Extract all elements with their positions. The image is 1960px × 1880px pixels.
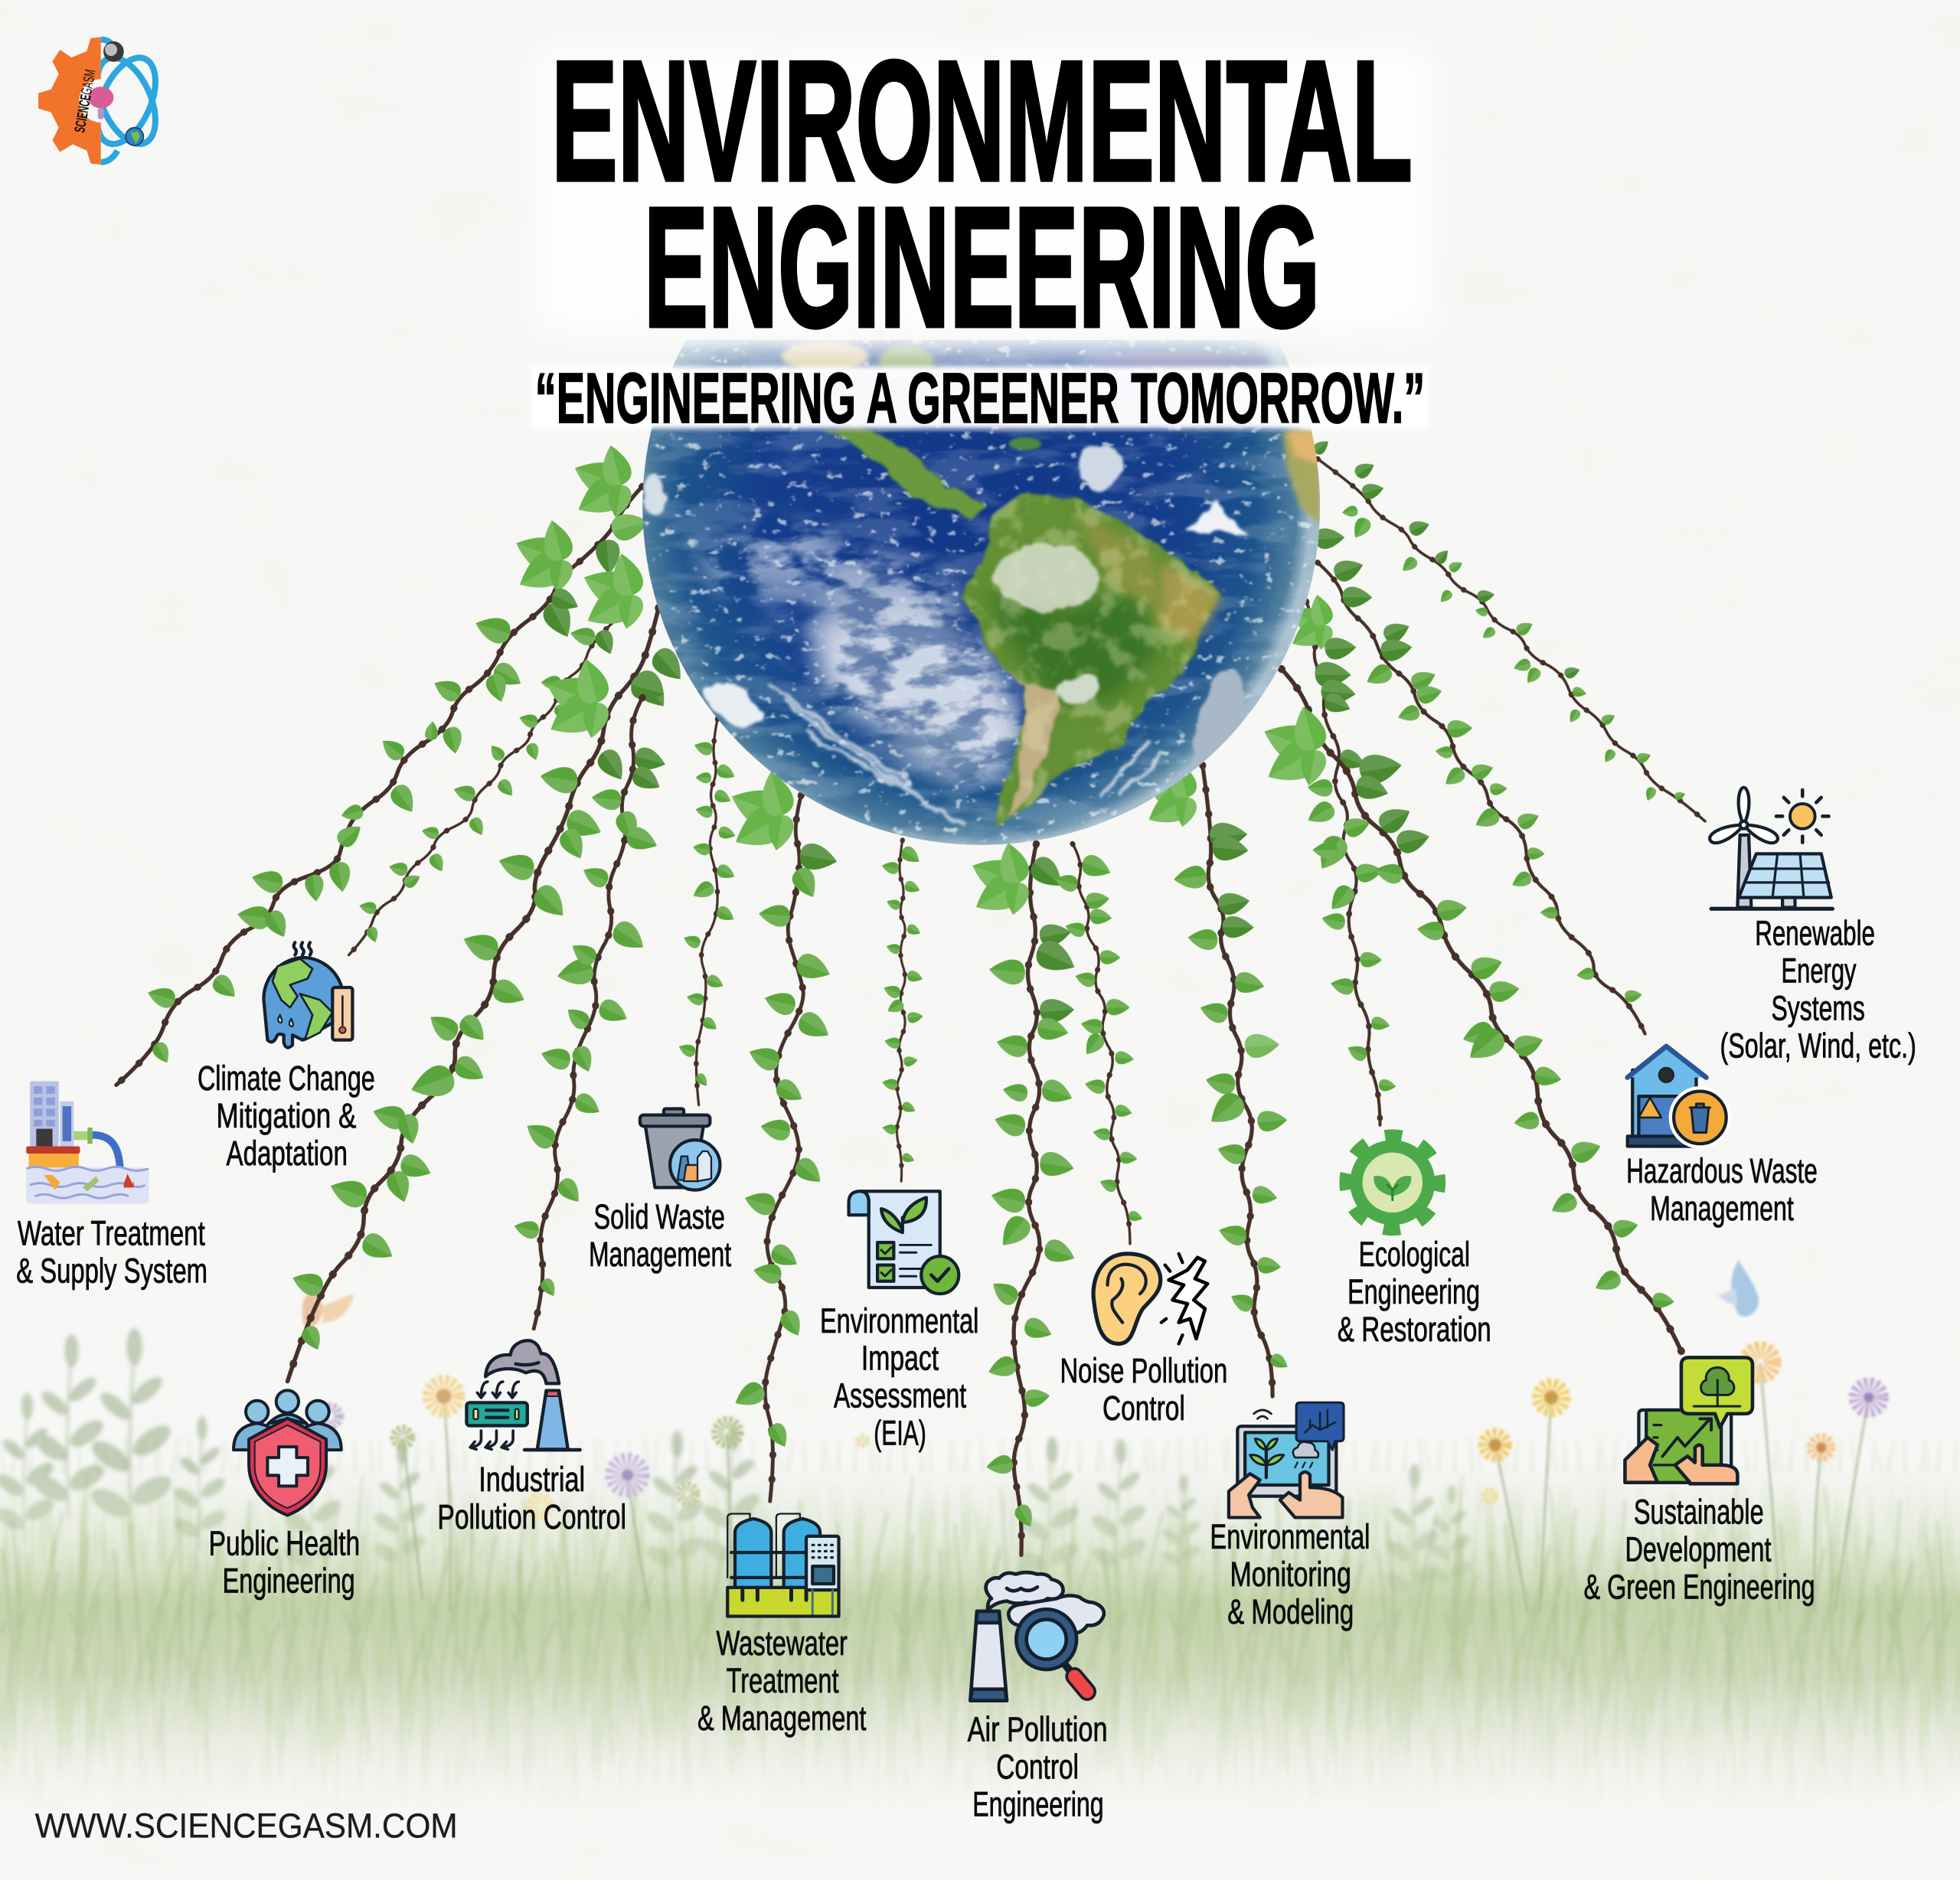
vine: to Wastewater Treatment xyxy=(725,768,839,1501)
vine: to Air Pollution Control xyxy=(966,840,1080,1555)
icon: hazard building with bin xyxy=(1628,1046,1731,1149)
land: top strip North America xyxy=(781,341,1269,380)
label: Water Treatment & Supply System: Water Treatment xyxy=(18,1213,205,1252)
grass haze band xyxy=(0,1463,1960,1813)
flower stems xyxy=(403,1363,1869,1613)
label: Air Pollution Control Engineering xyxy=(968,1710,1108,1824)
icon: factory stack with filter unit xyxy=(466,1340,580,1450)
label: Ecological Engineering & Restoration: Ecological xyxy=(1359,1235,1470,1274)
label: Climate Change Mitigation & Adaptation xyxy=(198,1059,375,1173)
label: Environmental Monitoring & Modeling xyxy=(1210,1517,1370,1631)
panel: Environmental Monitoring & Modeling xyxy=(1210,1402,1370,1631)
vine: to Public Health xyxy=(288,550,690,1381)
vine: to Environmental Impact Assessment xyxy=(880,840,924,1181)
vine: to Sustainable Development xyxy=(1258,669,1681,1351)
label: Noise Pollution Control: Noise Pollution xyxy=(1060,1351,1227,1390)
label: Climate Change Mitigation & Adaptation: Climate Change xyxy=(198,1059,375,1098)
label: Industrial Pollution Control xyxy=(437,1460,626,1536)
vine: to Renewable Energy xyxy=(1311,436,1705,821)
logo gear xyxy=(38,37,101,165)
label: Renewable Energy Systems (Solar, Wind, etc.): Systems xyxy=(1771,989,1865,1028)
sweeping cloud texture xyxy=(642,340,1320,853)
logo text: SCIENCEGASM xyxy=(72,68,99,134)
icon: growth plan and tree bubble xyxy=(1625,1357,1753,1483)
textured cloud masses xyxy=(700,525,1031,782)
icon: tablet monitoring xyxy=(1229,1402,1344,1517)
vine: to Industrial Pollution Control xyxy=(512,697,668,1329)
label: Sustainable Development & Green Engineering: Sustainable xyxy=(1634,1493,1764,1532)
vine: to Climate Change xyxy=(349,614,622,955)
label: Air Pollution Control Engineering: Control xyxy=(996,1748,1079,1787)
label: Sustainable Development & Green Engineering: & Green Engineering xyxy=(1584,1568,1815,1607)
label: Climate Change Mitigation & Adaptation: Adaptation xyxy=(227,1134,348,1173)
label: Noise Pollution Control: Control xyxy=(1102,1389,1185,1428)
label: Environmental Impact Assessment (EIA) xyxy=(820,1301,978,1453)
label: Renewable Energy Systems (Solar, Wind, etc.): Energy xyxy=(1782,951,1857,991)
label: Environmental Impact Assessment (EIA): Assessment xyxy=(834,1376,966,1415)
land: Caribbean island xyxy=(1009,438,1041,450)
label: Solid Waste Management xyxy=(589,1197,731,1274)
label: Noise Pollution Control xyxy=(1060,1351,1227,1428)
label: Wastewater Treatment & Management xyxy=(697,1624,867,1738)
label: Environmental Impact Assessment (EIA): (EIA) xyxy=(874,1414,926,1453)
icon: ear and noise burst xyxy=(1093,1254,1207,1343)
ocean xyxy=(642,340,1320,845)
butterfly: blue xyxy=(1717,1260,1759,1317)
vine: to Noise Pollution Control xyxy=(1053,844,1144,1244)
icon: people and medical shield xyxy=(234,1390,341,1515)
vine: to Environmental Monitoring xyxy=(1140,759,1291,1396)
cloud specks xyxy=(642,340,1320,853)
panel: Industrial Pollution Control xyxy=(437,1340,626,1536)
label: Water Treatment & Supply System: & Supply System xyxy=(16,1251,207,1290)
label: Hazardous Waste Management xyxy=(1626,1151,1818,1228)
logo planets xyxy=(103,41,143,145)
vine: to Solid Waste xyxy=(677,719,737,1105)
footer website: WWW.SCIENCEGASM.COM xyxy=(35,1806,458,1845)
title: ENGINEERING xyxy=(644,171,1320,363)
icon: chimney with magnifier xyxy=(970,1572,1104,1701)
label: Solid Waste Management: Solid Waste xyxy=(594,1197,725,1236)
label: Public Health Engineering xyxy=(209,1523,360,1600)
label: Environmental Impact Assessment (EIA): Impact xyxy=(861,1339,939,1378)
label: Ecological Engineering & Restoration: Engineering xyxy=(1348,1272,1480,1311)
panel: Air Pollution Control Engineering xyxy=(968,1572,1108,1824)
label: Public Health Engineering: Engineering xyxy=(223,1561,355,1600)
label: Air Pollution Control Engineering: Engineering xyxy=(972,1785,1104,1824)
land: Africa edge xyxy=(1282,431,1320,525)
logo atom orbits xyxy=(86,40,167,162)
label: Wastewater Treatment & Management: Treatment xyxy=(727,1661,839,1700)
label: Environmental Monitoring & Modeling: Monitoring xyxy=(1230,1555,1351,1594)
label: Wastewater Treatment & Management: & Management xyxy=(697,1699,867,1738)
label: Ecological Engineering & Restoration xyxy=(1338,1235,1491,1349)
panel: Public Health Engineering xyxy=(209,1390,360,1600)
icon: waste bin with recyclables xyxy=(640,1108,720,1190)
label: Public Health Engineering: Public Health xyxy=(209,1523,360,1562)
grass blades xyxy=(0,1438,1960,1738)
grass streak texture xyxy=(0,1490,1960,1782)
title xyxy=(551,25,1413,363)
panel: Noise Pollution Control xyxy=(1060,1254,1227,1428)
panel: Renewable Energy Systems xyxy=(1710,788,1916,1066)
panel: Climate Change Mitigation & Adaptation xyxy=(198,942,375,1173)
title glow xyxy=(531,50,1431,431)
panel: Sustainable Development & Green Engineering xyxy=(1584,1357,1815,1607)
vine: to Water Treatment xyxy=(116,442,652,1085)
logo brain xyxy=(88,86,113,119)
icon: document with sprout and check xyxy=(849,1191,959,1294)
label: Sustainable Development & Green Engineering xyxy=(1584,1493,1815,1607)
label: Environmental Monitoring & Modeling: & Modeling xyxy=(1227,1592,1354,1631)
label: Renewable Energy Systems (Solar, Wind, etc.): Renewable xyxy=(1755,914,1875,953)
label: Hazardous Waste Management: Hazardous Waste xyxy=(1626,1151,1818,1190)
globe xyxy=(642,340,1320,845)
logo: Sciencegasm xyxy=(38,37,167,165)
label: Industrial Pollution Control: Industrial xyxy=(479,1460,585,1499)
land: South America xyxy=(964,490,1221,826)
label: Air Pollution Control Engineering: Air Pollution xyxy=(968,1710,1108,1749)
icon: wind turbine, sun, solar panel xyxy=(1710,788,1832,909)
flowers xyxy=(322,1350,1881,1515)
land: Central America xyxy=(825,427,990,520)
icon: green gear with leaf xyxy=(1348,1137,1438,1228)
panel: Solid Waste Management xyxy=(589,1108,731,1274)
label: Environmental Impact Assessment (EIA): Environmental xyxy=(820,1301,978,1340)
label: Climate Change Mitigation & Adaptation: Mitigation & xyxy=(216,1096,356,1135)
label: Hazardous Waste Management: Management xyxy=(1650,1189,1794,1228)
icon: city water plant with polluted water xyxy=(26,1082,149,1204)
icon: treatment tanks on base xyxy=(727,1514,839,1616)
meadow background xyxy=(0,1328,1960,1813)
large cloud systems xyxy=(783,550,1029,782)
panel: Wastewater Treatment & Management xyxy=(697,1514,867,1738)
label: Sustainable Development & Green Engineering: Development xyxy=(1625,1530,1772,1569)
label: Solid Waste Management: Management xyxy=(589,1235,731,1274)
label: Wastewater Treatment & Management: Wastewater xyxy=(717,1624,848,1663)
panel: Ecological Engineering & Restoration xyxy=(1338,1137,1491,1349)
label: Environmental Monitoring & Modeling: Environmental xyxy=(1210,1517,1370,1556)
wild plants xyxy=(0,1328,1473,1606)
panel: Water Treatment & Supply System xyxy=(16,1082,207,1290)
panel: Environmental Impact Assessment xyxy=(820,1191,978,1453)
label: Industrial Pollution Control: Pollution Control xyxy=(437,1497,626,1536)
vine: to Hazardous Waste xyxy=(1314,527,1645,1033)
panel: Hazardous Waste Management xyxy=(1626,1046,1818,1228)
label: Ecological Engineering & Restoration: & Restoration xyxy=(1338,1310,1491,1349)
top fade of globe xyxy=(625,335,1338,373)
label: Water Treatment & Supply System xyxy=(16,1213,207,1290)
label: Renewable Energy Systems (Solar, Wind, etc.) xyxy=(1720,914,1916,1066)
icon: melting earth with thermometer xyxy=(263,942,352,1048)
vine: to Ecological Engineering xyxy=(1285,592,1396,1125)
butterfly: orange xyxy=(302,1293,354,1327)
